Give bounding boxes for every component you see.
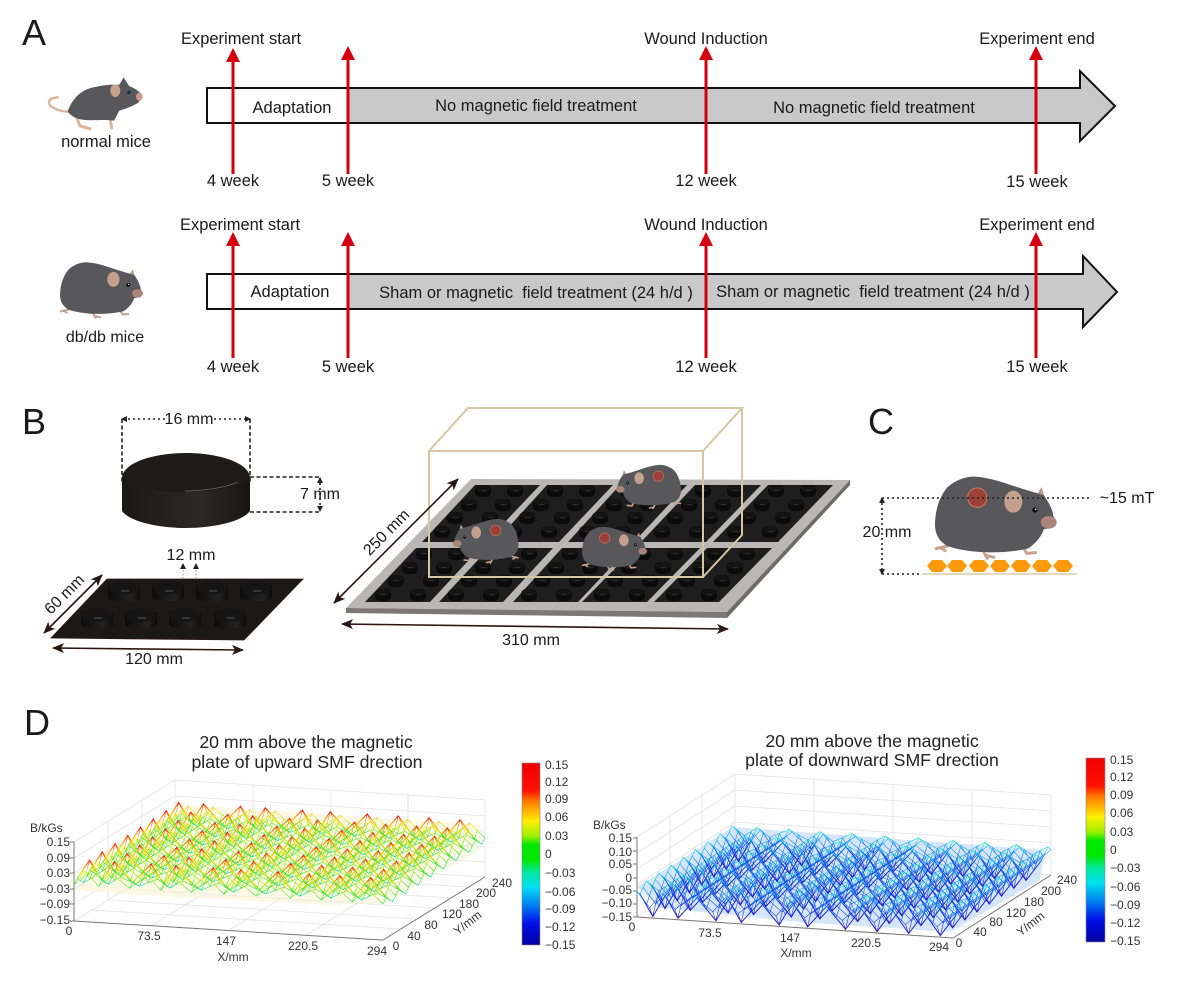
colorbar: 0.03 [545, 829, 569, 843]
y axis labels: 0 [956, 936, 963, 950]
arrow: 5 week [341, 232, 355, 358]
arrow: 4 week [226, 232, 240, 358]
dimension: 7 mm: 7 mm [300, 486, 340, 503]
panel A: db/db mice timeline [60, 216, 1117, 376]
z axis labels: B/kGs [30, 821, 63, 835]
dimension: 250 mm [334, 479, 458, 603]
plate frame [346, 479, 850, 618]
colorbar: −0.12 [545, 920, 576, 934]
x axis labels: X/mm [780, 946, 812, 960]
field level line [882, 498, 1092, 574]
x axis labels: 147 [216, 934, 236, 948]
label: sham or magnetic treatment 1: Sham or magnetic field treatment (24 h/d ) [379, 284, 693, 302]
plot title: plate of downward SMF drection [745, 750, 999, 770]
y axis labels: Y/mm [451, 908, 484, 938]
3D wall grid [74, 780, 485, 935]
dimension: 310 mm: 310 mm [502, 632, 560, 649]
week label 12: 12 week [675, 172, 737, 190]
week label 4: 4 week [207, 172, 260, 190]
colorbar: 0.15 [545, 758, 569, 772]
arrow: 4 week [226, 48, 240, 174]
x axis labels: X/mm [217, 950, 249, 964]
large magnetic plate with cage and mice [334, 408, 850, 649]
label: ~15 mT: ~15 mT [1100, 490, 1155, 507]
z axis labels: 0.05 [609, 857, 632, 871]
single magnet with dimensions [122, 411, 340, 528]
magnet plate 120 x 60 mm [42, 547, 303, 668]
x axis labels: 294 [929, 940, 949, 954]
colorbar: −0.03 [545, 866, 576, 880]
colorbar: −0.03 [1110, 861, 1141, 875]
panel C: mouse above magnets [863, 477, 1155, 574]
y axis labels: 180 [459, 897, 479, 911]
dimension: 250 mm: 250 mm [360, 506, 413, 559]
surface wireframe [637, 824, 1051, 938]
colorbar: 0.03 [1110, 825, 1134, 839]
z axis labels: −0.03 [40, 882, 70, 896]
surface wireframe [74, 796, 485, 908]
dimension: 120 mm: 120 mm [125, 651, 183, 668]
x axis labels: 147 [780, 931, 800, 945]
week label 4: 4 week [207, 358, 260, 376]
z axis labels: −0.09 [40, 897, 70, 911]
y axis labels: 0 [393, 939, 400, 953]
arrow: 15 week [1029, 232, 1043, 358]
z axis labels: −0.15 [602, 910, 632, 924]
label B: B [22, 401, 46, 442]
panel A: normal mice timeline [49, 30, 1115, 191]
y axis labels: 120 [442, 907, 462, 921]
z axis labels: 0 [625, 871, 632, 885]
y axis labels: 80 [989, 915, 1003, 929]
panel D: upward SMF plot [30, 732, 576, 964]
z axis labels: −0.10 [602, 896, 632, 910]
week label 5: 5 week [322, 358, 375, 376]
week label 15: 15 week [1006, 358, 1068, 376]
caption: db/db mice: db/db mice [66, 329, 144, 346]
colorbar [1086, 753, 1141, 948]
plot title [745, 731, 999, 770]
arrow: 12 week [699, 232, 713, 358]
arrow: 12 week [699, 46, 713, 174]
label: experiment end: Experiment end [979, 216, 1095, 234]
dimension: 12 mm: 12 mm [167, 547, 215, 564]
y axis labels: 40 [973, 925, 987, 939]
z axis labels: 0.10 [609, 845, 632, 859]
x axis labels: 0 [66, 924, 73, 938]
z axis labels: −0.05 [602, 883, 632, 897]
mouse: right [582, 527, 647, 571]
ground line [922, 573, 1077, 575]
arrow: 15 week [1029, 46, 1043, 174]
z axis labels: 0.03 [47, 866, 70, 880]
label: experiment start: Experiment start [181, 30, 301, 48]
colorbar: 0 [545, 847, 552, 861]
y axis labels: 240 [1057, 873, 1077, 887]
x axis labels [629, 920, 949, 960]
x axis labels: 220.5 [288, 939, 318, 953]
axes [633, 837, 1051, 938]
label: no magnetic field treatment 1: No magnetic field treatment [435, 97, 637, 115]
label: wound induction: Wound Induction [644, 216, 768, 234]
y axis labels: 200 [476, 886, 496, 900]
colorbar: −0.15 [545, 938, 576, 952]
dimension: 16 mm [122, 411, 250, 482]
z axis labels: 0.15 [609, 831, 632, 845]
label D: D [24, 702, 50, 743]
colorbar: 0.06 [545, 810, 569, 824]
timeline arrow: normal mice [207, 71, 1115, 141]
colorbar: 0.06 [1110, 806, 1134, 820]
colorbar: 0.09 [545, 792, 569, 806]
colorbar: 0.15 [1110, 753, 1134, 767]
dimension: 60 mm: 60 mm [42, 572, 88, 618]
z axis labels: B/kGs [593, 818, 626, 832]
label: experiment end: Experiment end [979, 30, 1095, 48]
colorbar: −0.09 [545, 902, 576, 916]
y axis labels: 200 [1041, 884, 1061, 898]
plot title: plate of upward SMF drection [191, 752, 423, 772]
colorbar: −0.09 [1110, 898, 1141, 912]
x axis labels: 220.5 [851, 936, 881, 950]
magnets row [927, 560, 1073, 572]
z axis labels: −0.15 [40, 913, 70, 927]
y axis labels: 80 [424, 918, 438, 932]
mouse: left [453, 519, 519, 563]
icon: db/db mouse [60, 262, 143, 318]
dimension: 310 mm [342, 624, 728, 649]
label: adaptation: Adaptation [253, 99, 331, 117]
x axis labels [66, 924, 387, 964]
dimension: 16 mm: 16 mm [165, 411, 213, 428]
z axis labels: 0.15 [47, 835, 70, 849]
z axis labels [30, 821, 70, 927]
cage outline [429, 408, 742, 577]
label: adaptation: Adaptation [251, 283, 329, 301]
plot title [191, 732, 423, 772]
dimension: 7 mm [250, 477, 340, 512]
colorbar [522, 758, 576, 952]
mouse: back [616, 465, 681, 509]
dimension: 60 mm [42, 572, 102, 633]
icon: cylinder magnet [122, 453, 250, 528]
colorbar: −0.06 [545, 885, 576, 899]
colorbar: −0.12 [1110, 916, 1141, 930]
label A: A [22, 12, 46, 53]
z axis labels: 0.09 [47, 851, 70, 865]
colorbar: 0 [1110, 843, 1117, 857]
week label 12: 12 week [675, 358, 737, 376]
y axis labels: 120 [1006, 906, 1026, 920]
label: no magnetic field treatment 2: No magnetic field treatment [773, 99, 975, 117]
label: sham or magnetic treatment 2: Sham or magnetic field treatment (24 h/d ) [716, 283, 1030, 301]
icon: normal mouse [49, 77, 143, 129]
y axis labels [956, 873, 1077, 950]
y axis labels: 240 [492, 876, 512, 890]
dimension: 20 mm: 20 mm [863, 524, 911, 541]
3D wall grid [637, 774, 1051, 933]
y axis labels [393, 876, 512, 953]
colorbar: 0.09 [1110, 788, 1134, 802]
label: wound induction: Wound Induction [644, 30, 768, 48]
z axis labels [593, 818, 632, 924]
y axis labels: 180 [1024, 895, 1044, 909]
week label 15: 15 week [1006, 173, 1068, 191]
x axis labels: 0 [629, 920, 636, 934]
magnets on plate [81, 582, 272, 628]
caption: normal mice: normal mice [61, 133, 151, 151]
y axis labels: 40 [407, 929, 421, 943]
week label 5: 5 week [322, 172, 375, 190]
dimension: 12 mm [167, 547, 215, 579]
icon: mouse with wound [935, 477, 1057, 558]
plot title: 20 mm above the magnetic [199, 732, 413, 752]
small magnets [375, 485, 816, 601]
label: experiment start: Experiment start [180, 216, 300, 234]
dimension: 20 mm [863, 498, 911, 574]
colorbar: 0.12 [545, 775, 569, 789]
colorbar: 0.12 [1110, 770, 1134, 784]
x axis labels: 73.5 [698, 926, 722, 940]
x axis labels: 73.5 [137, 929, 161, 943]
panel D: downward SMF plot [593, 731, 1141, 960]
y axis labels: Y/mm [1014, 909, 1047, 939]
colorbar: −0.06 [1110, 880, 1141, 894]
x axis labels: 294 [367, 944, 387, 958]
black magnet panels [365, 485, 833, 602]
plot title: 20 mm above the magnetic [765, 731, 979, 751]
arrow: 5 week [341, 46, 355, 174]
plate [51, 579, 303, 640]
label C: C [868, 401, 894, 442]
axes [70, 842, 485, 940]
colorbar: −0.15 [1110, 934, 1141, 948]
timeline arrow: db/db mice [207, 256, 1117, 327]
